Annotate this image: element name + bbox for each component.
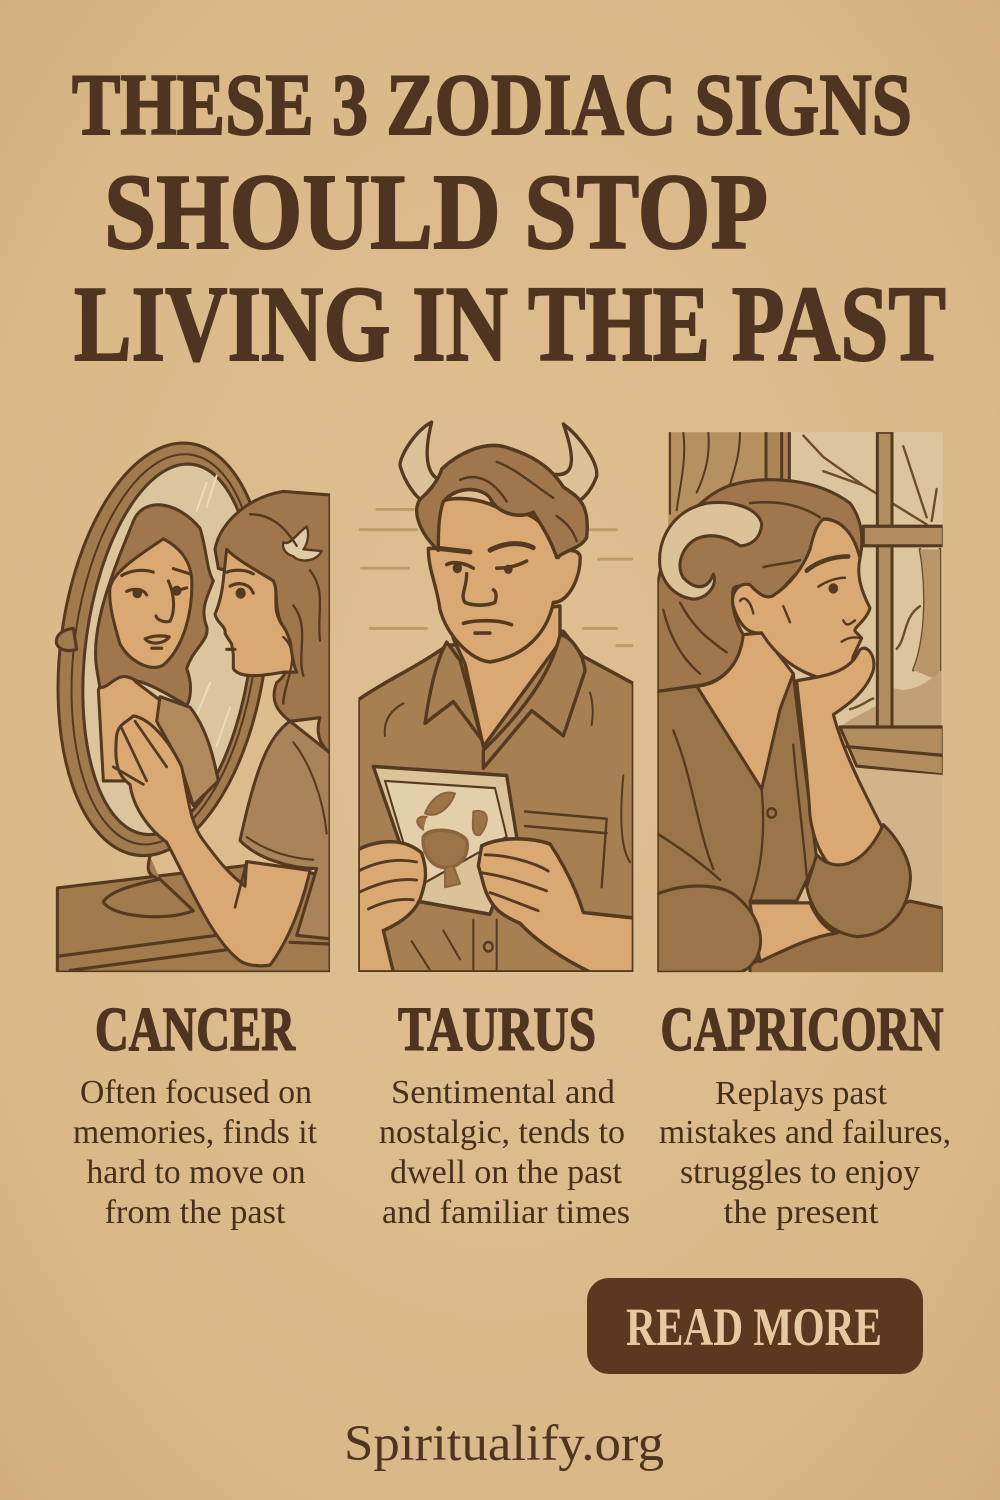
ram horn (660, 502, 762, 599)
website: Spiritualify.org (344, 1416, 664, 1472)
title (72, 57, 946, 384)
descriptions: nostalgic, tends to (379, 1114, 625, 1151)
crab photo (373, 766, 517, 914)
descriptions: memories, finds it (73, 1114, 318, 1151)
lower sleeve (657, 886, 761, 972)
neck (697, 633, 793, 789)
woman's hair (657, 480, 862, 691)
girl arm and hand (116, 716, 310, 966)
hair flower (283, 526, 322, 561)
window frame (863, 432, 943, 731)
mirror reflection (96, 505, 218, 805)
descriptions: the present (724, 1194, 879, 1231)
sign names: TAURUS (398, 996, 596, 1064)
table (57, 865, 330, 972)
table (750, 901, 943, 974)
sign names (95, 996, 944, 1064)
girl hair (215, 491, 330, 753)
title: SHOULD STOP (104, 153, 768, 272)
descriptions: struggles to enjoy (680, 1154, 920, 1191)
pocket (525, 812, 607, 887)
man's face details (438, 544, 533, 552)
collar (425, 635, 585, 768)
shirt button (484, 942, 493, 951)
wall below sill (850, 768, 943, 908)
curtain (668, 432, 790, 528)
descriptions: Sentimental and (391, 1074, 615, 1111)
window glass (783, 432, 943, 738)
icon: bull horns (400, 422, 597, 503)
sleeve cuff (807, 825, 910, 937)
sign names: CANCER (95, 996, 296, 1064)
tree outside window (803, 436, 940, 709)
descriptions (73, 1074, 951, 1231)
cardigan (657, 674, 817, 972)
read more button: READ MORE (626, 1297, 882, 1357)
panel: cancer illustration (34, 429, 330, 972)
neck (450, 606, 560, 747)
girl face (215, 549, 297, 676)
man's shirt (358, 631, 633, 972)
descriptions: from the past (104, 1194, 286, 1231)
knob (56, 628, 77, 651)
lower arm (750, 903, 837, 962)
left hand (358, 842, 426, 972)
man's hair (417, 446, 587, 557)
descriptions: mistakes and failures, (659, 1114, 951, 1151)
descriptions: Replays past (715, 1075, 888, 1112)
descriptions: and familiar times (382, 1194, 630, 1231)
man's head (428, 499, 580, 662)
descriptions: hard to move on (86, 1154, 306, 1191)
descriptions: Often focused on (80, 1074, 312, 1111)
read more button (587, 1278, 923, 1374)
girl dress (240, 721, 330, 939)
resting arm and hand (797, 648, 882, 871)
woman's face (733, 519, 870, 678)
panel: taurus illustration (358, 422, 633, 972)
descriptions: dwell on the past (390, 1154, 623, 1191)
window sill (840, 727, 943, 775)
panel: capricorn illustration (657, 432, 943, 974)
icon: oval mirror (34, 429, 292, 917)
right hand (478, 839, 633, 972)
